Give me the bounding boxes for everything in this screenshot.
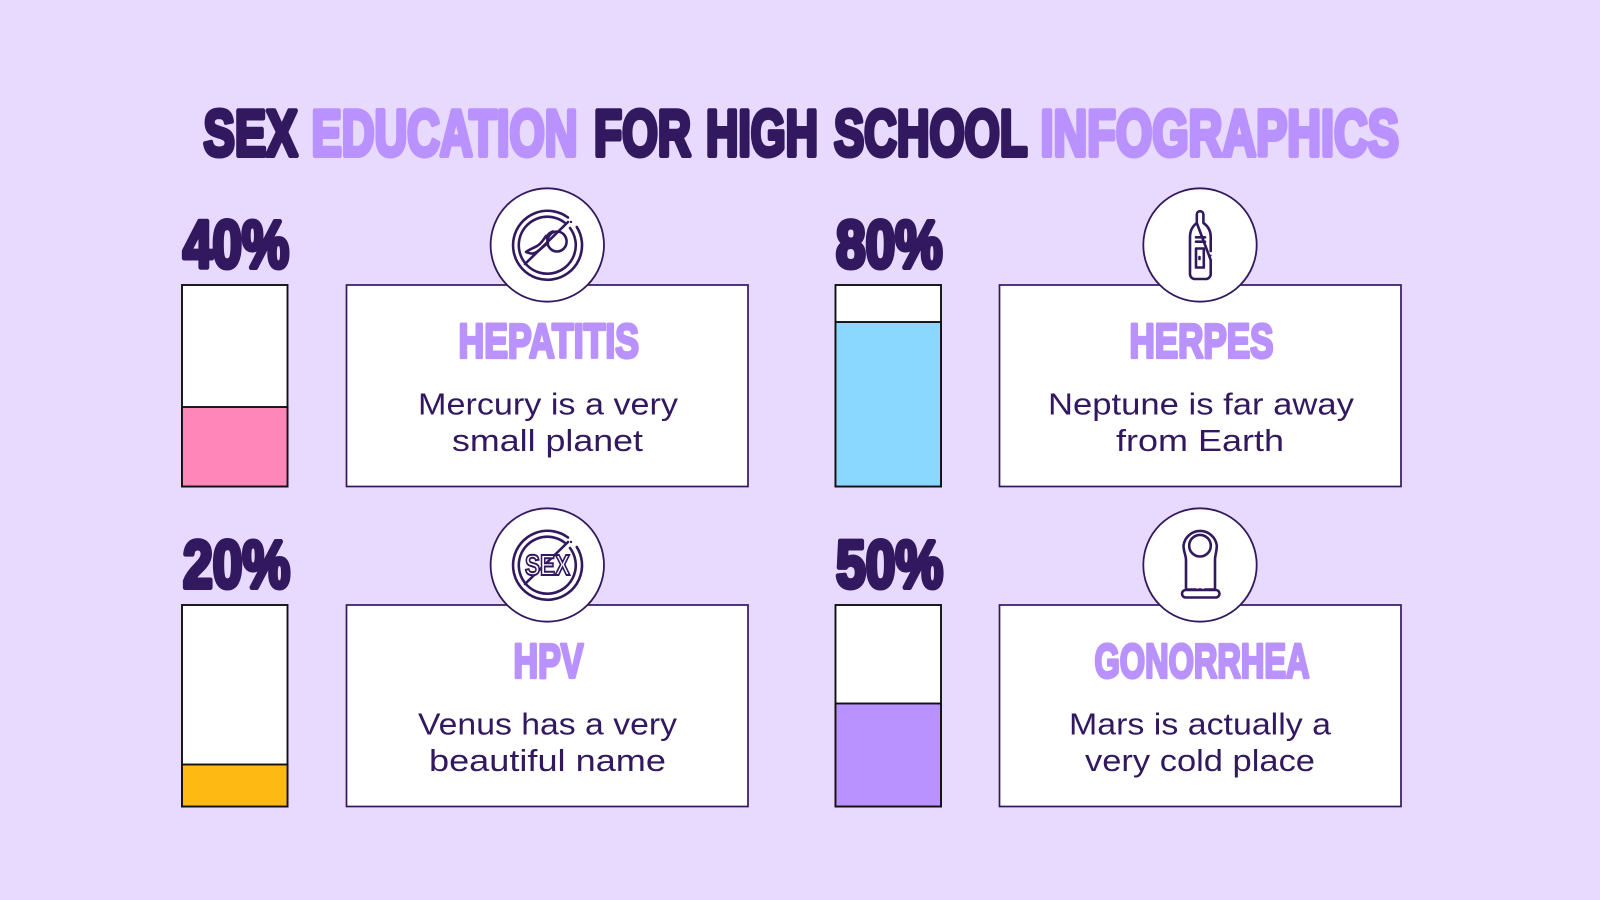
description: herpes [1048,386,1355,458]
title: SEX [204,96,298,170]
description: gonorrhea: very cold place [1085,743,1315,778]
panel: hpv [182,508,748,806]
icon: test tube [1143,188,1257,302]
card: hpv [346,605,748,806]
panel: gonorrhea [836,508,1401,806]
title: EDUCATION [312,96,578,170]
heading: herpes: HERPES [1130,316,1274,368]
card: gonorrhea [1000,605,1401,806]
icon: no sex [491,508,604,622]
panel: hepatitis [182,188,748,487]
icon: no sex: SEX [525,550,571,582]
description: hpv: beautiful name [429,743,666,778]
title: FOR [594,96,691,170]
bar: 80% blue [836,285,941,486]
heading: hpv: HPV [514,636,584,688]
panel: herpes [836,188,1401,487]
title: SCHOOL [834,96,1028,170]
description: hepatitis: Mercury is a very [418,386,679,421]
description: hepatitis [418,386,679,458]
percentage: 80%: 80% [836,208,942,282]
description: hpv: Venus has a very [418,706,678,741]
heading: hepatitis: HEPATITIS [458,316,639,368]
percentage: 40%: 40% [183,208,289,282]
description: hepatitis: small planet [452,423,643,458]
title [204,96,1399,170]
card: herpes [1000,285,1401,486]
percentage: 50%: 50% [836,528,943,602]
card: hepatitis [346,285,748,486]
percentage: 20%: 20% [183,528,290,602]
icon: condom [1143,508,1257,622]
title: HIGH [706,96,818,170]
description: herpes: from Earth [1116,423,1284,458]
description: gonorrhea: Mars is actually a [1069,706,1332,741]
icon: no sperm [491,188,604,302]
description: hpv [418,706,678,778]
bar: 20% orange [182,605,288,806]
description: herpes: Neptune is far away [1048,386,1355,421]
title: INFOGRAPHICS [1040,96,1399,170]
heading: gonorrhea: GONORRHEA [1094,636,1310,688]
bar: 50% purple [836,605,941,806]
description: gonorrhea [1069,706,1332,778]
bar: 40% pink [182,285,288,486]
